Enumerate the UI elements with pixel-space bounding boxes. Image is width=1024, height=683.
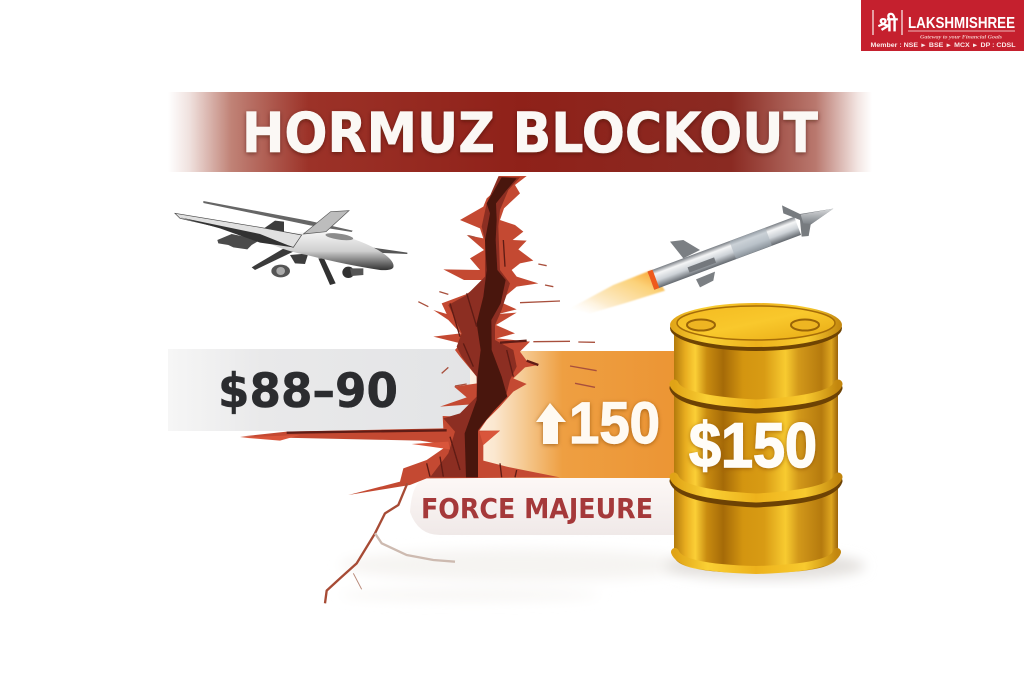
force majeure panel bbox=[410, 478, 676, 535]
barrel price: $150 bbox=[689, 411, 817, 481]
drone: landing gear bbox=[252, 247, 363, 285]
barrel: bottom rim bbox=[675, 552, 837, 570]
missile: collar and nose cone bbox=[782, 205, 833, 237]
logo: emblem: श्री bbox=[878, 12, 898, 36]
logo: wordmark underline bbox=[908, 30, 1015, 32]
drone: rear wing bbox=[203, 201, 353, 232]
barrel: upper rib bbox=[674, 384, 838, 409]
logo: tagline: Gateway to your Financial Goals bbox=[920, 34, 1002, 40]
current price text: $88–90 bbox=[218, 364, 398, 419]
drone: engine bbox=[264, 221, 284, 233]
crack: bright red fragments bbox=[240, 431, 500, 449]
force majeure text: FORCE MAJEURE bbox=[421, 492, 653, 525]
rise value: arrow and 150: 150 bbox=[569, 391, 660, 456]
drone: fuselage bbox=[260, 232, 394, 270]
crack: red body bbox=[240, 176, 560, 495]
orange rise band bbox=[470, 351, 675, 479]
drone: tail fin bbox=[303, 211, 349, 234]
icon: drone bbox=[175, 201, 407, 285]
crack: dark crevice bbox=[465, 177, 517, 477]
logo: membership line: Member : NSE ► BSE ► MCX ► DP : CDSL bbox=[870, 43, 1016, 49]
current price band bbox=[168, 349, 478, 431]
icon: oil barrel bbox=[665, 303, 865, 580]
missile: flame bbox=[570, 270, 665, 313]
crack bbox=[240, 176, 597, 603]
crack: lower branch bbox=[325, 483, 407, 603]
barrel: lid bbox=[670, 303, 842, 351]
missile: body bbox=[648, 217, 801, 290]
drone: main wing bbox=[175, 213, 302, 247]
crack: hairline splinters bbox=[418, 236, 597, 387]
drone: nose antenna bbox=[367, 247, 407, 254]
barrel: lower rib bbox=[674, 477, 838, 503]
barrel: body bbox=[674, 326, 838, 573]
crack: maroon inner wall bbox=[430, 177, 520, 477]
logo bbox=[861, 0, 1024, 51]
icon: missile bbox=[570, 205, 833, 313]
logo: emblem bbox=[873, 10, 902, 36]
missile: fins bbox=[670, 240, 700, 258]
title banner bbox=[168, 92, 872, 172]
crack: strata lines bbox=[287, 240, 538, 477]
barrel: bungs bbox=[687, 320, 715, 330]
title text: HORMUZ BLOCKOUT bbox=[242, 101, 818, 165]
ground haze bbox=[340, 549, 700, 600]
drone: weapon pods bbox=[217, 234, 260, 249]
icon: up arrow bbox=[536, 403, 566, 444]
